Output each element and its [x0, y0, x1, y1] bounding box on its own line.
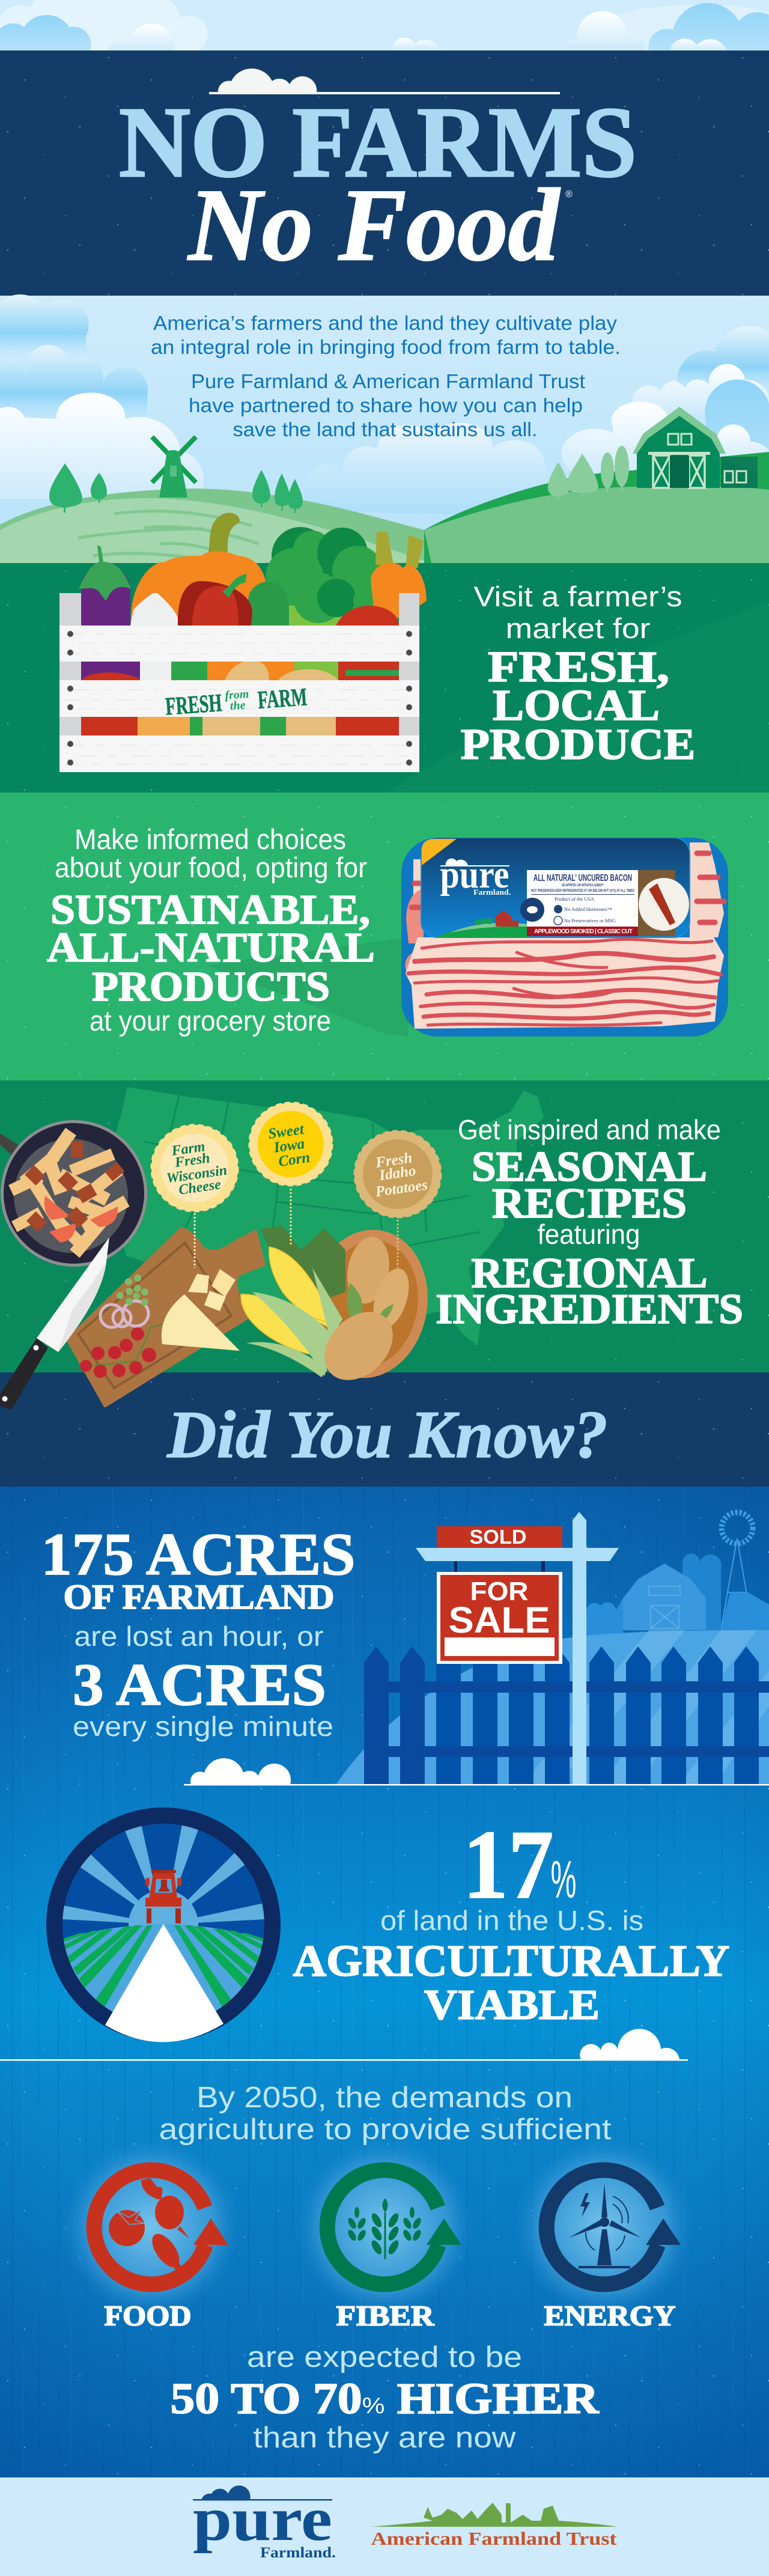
text: make informed choices: PRODUCTS — [92, 964, 330, 1010]
illustration: knife — [0, 1237, 109, 1410]
for sale board: SALE — [448, 1600, 550, 1640]
corn — [147, 2229, 190, 2280]
logo: pure farmland: pure — [193, 2485, 332, 2554]
sign post — [573, 1512, 586, 1784]
text: 17 percent stat: % — [550, 1850, 577, 1909]
vegetable: tomato — [336, 606, 399, 626]
cherry tomatoes — [80, 1324, 162, 1378]
tractor — [145, 1870, 181, 1923]
silos — [682, 1554, 722, 1630]
badge: idaho potatoes: Fresh — [374, 1150, 413, 1171]
panel: grocery store green section — [0, 793, 769, 1080]
text: introduction: America’s farmers and the land they cultivate play — [153, 312, 618, 334]
text: introduction: an integral role in bringing food from farm to table. — [151, 336, 621, 358]
tomato — [109, 2210, 145, 2246]
package info panel: No Added Hormones™ — [564, 907, 612, 912]
grass strokes — [78, 511, 258, 562]
icon: windmill — [152, 437, 196, 498]
illustration: picket fence — [364, 1646, 769, 1784]
badge: iowa corn: Corn — [278, 1149, 311, 1170]
wheat stalks — [347, 2198, 422, 2259]
text: 17 percent stat: 17 — [463, 1810, 554, 1919]
illustration: farm silhouette behind fence — [336, 1512, 769, 1784]
badge: iowa corn — [249, 1103, 332, 1186]
title: No Food: No Food — [187, 168, 561, 282]
text: 175 acres stat: are lost an hour, or — [74, 1621, 323, 1652]
windmill silhouette — [721, 1512, 753, 1630]
barn silhouette — [623, 1564, 706, 1630]
text: 175 acres stat: 3 ACRES — [73, 1651, 326, 1718]
labels: food fiber energy: ENERGY — [544, 2300, 675, 2332]
text: make informed choices: about your food, opting for — [55, 851, 367, 883]
icon: cloud and rule above title — [209, 69, 560, 94]
package info panel: No Preservatives or MSG — [564, 918, 616, 924]
text: 17 percent stat: VIABLE — [424, 1982, 600, 2029]
package logo: pure — [440, 853, 509, 897]
icon: energy cycle — [514, 2137, 694, 2317]
text: seasonal recipes: RECIPES — [492, 1180, 687, 1227]
peas — [117, 1274, 148, 1306]
illustration: vegetable crate — [59, 513, 427, 772]
icon: tractor gauge — [48, 1816, 279, 2043]
text: by 2050 — [159, 2081, 612, 2146]
illustration: bacon package — [401, 838, 728, 1037]
badge: wisconsin cheese: Fresh — [173, 1150, 211, 1171]
text: 17 percent stat: of land in the U.S. is — [380, 1905, 643, 1936]
icon: fiber cycle — [294, 2137, 475, 2317]
chard leaves — [261, 1226, 345, 1304]
labels: food fiber energy: FOOD — [105, 2300, 191, 2332]
for sale board — [437, 1572, 562, 1664]
illustration: frying pan with pasta — [0, 1120, 147, 1267]
vegetable: pumpkin — [131, 552, 267, 626]
potatoes — [342, 1234, 394, 1307]
beet — [155, 2196, 184, 2229]
package info panel — [520, 870, 689, 936]
text: 175 acres stat: every single minute — [73, 1711, 333, 1742]
leaves — [347, 1283, 394, 1328]
text: 50 to 70 percent higher: 50 TO 70 % HIGHER — [171, 2374, 600, 2423]
panel: sky header with clouds — [0, 0, 769, 50]
bacon strips — [405, 842, 724, 1029]
bushes — [586, 1592, 769, 1643]
package logo: Farmland. — [473, 888, 511, 897]
crate label — [165, 683, 308, 721]
vegetable: broccoli — [266, 527, 383, 626]
text: seasonal recipes: Get inspired and make — [458, 1114, 721, 1145]
panel: did you know band — [0, 1372, 769, 1487]
badge: iowa corn: Iowa — [272, 1136, 306, 1156]
dotted connectors — [195, 1189, 398, 1268]
sold rider: SOLD — [470, 1526, 526, 1548]
hill: front left — [0, 498, 431, 563]
crate label: from — [225, 687, 249, 702]
vegetable: pumpkin stem — [208, 513, 240, 556]
package info panel: ALL NATURAL' UNCURED BACON — [533, 873, 632, 883]
crate label: FARM — [257, 683, 308, 714]
tray — [401, 838, 728, 1037]
package label — [421, 838, 690, 937]
badge: idaho potatoes: Potatoes — [374, 1177, 429, 1200]
text: 50 to 70 percent higher: are expected to be — [247, 2341, 522, 2374]
badge: iowa corn: Sweet — [267, 1121, 306, 1142]
divider with cloud — [0, 2029, 688, 2061]
cheese wedge — [162, 1269, 240, 1351]
text: 17 percent stat: AGRICULTURALLY — [293, 1937, 729, 1986]
big potato — [311, 1299, 406, 1393]
text: 17 percent stat — [293, 1810, 729, 2029]
crate slats — [59, 626, 419, 772]
text: visit a farmer's market: PRODUCE — [460, 720, 696, 769]
panel: farm landscape — [0, 294, 769, 563]
vegetable: eggplant — [79, 545, 131, 626]
icon: green barn — [633, 407, 758, 488]
cloud: left stack — [0, 294, 204, 499]
hill: back left — [0, 489, 431, 563]
vegetable: garlic — [130, 593, 180, 626]
package info panel: Product of the USA — [555, 897, 594, 902]
hill: front right — [424, 486, 769, 563]
text: visit a farmer's market: LOCAL — [493, 681, 660, 729]
text: 175 acres stat: 175 ACRES — [41, 1521, 356, 1588]
badge: wisconsin cheese: Cheese — [178, 1177, 222, 1198]
labels: food fiber energy: FIBER — [336, 2300, 435, 2332]
badge: wisconsin cheese — [151, 1125, 238, 1211]
text: introduction: save the land that sustains us all. — [233, 418, 537, 440]
text: by 2050: By 2050, the demands on — [196, 2081, 573, 2114]
panel: farmer's market green section — [0, 563, 769, 793]
vegetable: cucumber — [248, 582, 289, 626]
text: visit a farmer's market: market for — [506, 612, 650, 644]
package info panel: NOT PRESERVED-KEEP REFRIGERATED AT OR BELOW 40°F (4°C) AT ALL TIMES — [531, 889, 634, 893]
produce seen through lower gap — [81, 717, 399, 735]
illustration: cutting board — [68, 1229, 264, 1405]
text: introduction: Pure Farmland & American Farmland Trust — [191, 370, 585, 392]
onion rings — [100, 1301, 148, 1327]
text: seasonal recipes: REGIONAL — [471, 1250, 708, 1297]
badge: wisconsin cheese: Farm — [170, 1139, 206, 1159]
cloud: centre — [304, 423, 559, 517]
logo: american farmland trust — [371, 2503, 617, 2549]
crate label: the — [229, 698, 246, 713]
registered mark: ® — [565, 189, 573, 199]
text: seasonal recipes: INGREDIENTS — [436, 1286, 743, 1333]
labels: food fiber energy — [105, 2300, 675, 2332]
package barn — [496, 910, 518, 927]
crate posts — [59, 593, 419, 772]
divider with cloud — [184, 1758, 769, 1786]
sun rays — [62, 1825, 264, 1926]
gauge ring — [54, 1816, 273, 2033]
wind turbine — [569, 2183, 641, 2268]
badge: idaho potatoes — [354, 1131, 441, 1217]
crate label: FRESH — [165, 689, 223, 721]
produce seen through gap — [81, 660, 399, 680]
text: seasonal recipes: SEASONAL — [472, 1143, 707, 1190]
text: make informed choices — [47, 823, 375, 1037]
text: visit a farmer's market: Visit a farmer’s — [473, 580, 682, 612]
sold rider — [437, 1526, 562, 1548]
text: make informed choices: SUSTAINABLE, — [50, 887, 370, 933]
cloud: right stack — [562, 326, 769, 475]
illustration: bowl of corn and potatoes — [241, 1220, 439, 1393]
text: make informed choices: at your grocery store — [90, 1005, 331, 1037]
text: introduction — [151, 312, 621, 440]
crate nails — [67, 631, 412, 766]
road — [105, 1924, 223, 2042]
text: introduction: have partnered to share how you can help — [189, 394, 583, 416]
text: make informed choices: ALL-NATURAL — [47, 925, 375, 971]
hill: hedge right — [424, 452, 769, 563]
text: 50 to 70 percent higher: than they are now — [254, 2422, 516, 2454]
badge: idaho potatoes: Idaho — [378, 1163, 417, 1184]
for sale board: FOR — [470, 1577, 529, 1606]
vegetable: carrots — [371, 532, 427, 626]
panel: wood blue background — [0, 1487, 769, 2477]
text: 175 acres stat: OF FARMLAND — [64, 1577, 334, 1616]
badge: wisconsin cheese: Wisconsin — [165, 1163, 228, 1187]
text: 50 to 70 percent higher — [171, 2341, 600, 2454]
text: 175 acres stat — [41, 1521, 356, 1742]
text: make informed choices: Make informed choices — [74, 823, 346, 855]
corn cobs — [269, 1247, 330, 1329]
crossarm — [416, 1548, 619, 1561]
text: visit a farmer's market: FRESH, — [488, 642, 669, 691]
trees: right — [548, 446, 629, 499]
illustration: for sale sign — [416, 1512, 619, 1784]
map: United States silhouette — [108, 1087, 544, 1346]
trees: left — [49, 463, 303, 513]
text: by 2050: agriculture to provide sufficient — [159, 2113, 612, 2146]
panel: footer — [0, 2477, 769, 2576]
title: No Farms: NO FARMS — [119, 87, 637, 198]
package info panel: NO NITRITES OR NITRATES ADDED** — [562, 884, 604, 888]
heading: did you know: Did You Know? — [166, 1398, 608, 1472]
text: seasonal recipes — [436, 1114, 743, 1333]
package info panel: APPLEWOOD SMOKED | CLASSIC CUT — [534, 928, 633, 935]
icon: food cycle — [61, 2137, 242, 2317]
logo: pure farmland: Farmland. — [260, 2545, 336, 2561]
panel: recipes green section — [0, 1080, 769, 1372]
panel: navy title band — [0, 50, 769, 296]
text: seasonal recipes: featuring — [537, 1219, 640, 1250]
vegetable: bell pepper — [178, 574, 252, 626]
hill with stripes — [336, 1630, 769, 1784]
field stripes — [64, 1924, 263, 2012]
text: visit a farmer's market — [460, 580, 696, 769]
logo: american farmland trust: American Farmland Trust — [371, 2528, 617, 2549]
